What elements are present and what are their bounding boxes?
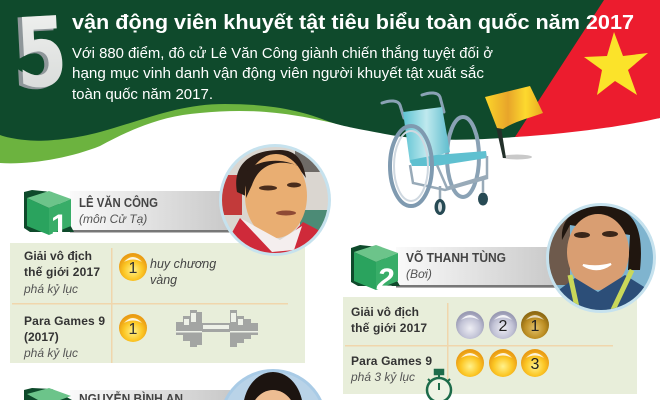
header: dark green banner — [0, 0, 660, 141]
medal caption: huy chương — [150, 257, 216, 271]
header bar 2 — [396, 247, 556, 288]
icon: yellow flag — [485, 86, 543, 160]
big number 5: 5 — [10, 0, 66, 112]
icon: wheelchair — [382, 93, 488, 215]
panel: stats 1: phá kỷ lục — [23, 282, 78, 296]
panel: stats 1: (2017) — [24, 330, 59, 344]
icon: stopwatch — [427, 370, 451, 400]
panel: stats 2: Para Games 9 — [351, 354, 432, 368]
athlete 1 — [10, 144, 331, 363]
header bar 3 — [70, 390, 230, 400]
panel: stats 2 — [343, 297, 637, 400]
medals world championship — [456, 311, 549, 339]
icon: barbell — [176, 310, 258, 347]
icon: cube 1: 1 — [51, 209, 68, 242]
intro text — [72, 45, 493, 103]
photo: Lê Văn Công — [219, 144, 331, 258]
panel: stats 2: Giải vô địch — [351, 305, 419, 319]
name 1: LÊ VĂN CÔNG — [79, 195, 158, 210]
medal gold: 1 — [129, 260, 138, 277]
medal caption — [150, 257, 216, 287]
panel: stats 2: phá 3 kỷ lục — [350, 370, 415, 384]
title: vận động viên khuyết tật tiêu biểu toàn quốc năm 2017 — [72, 12, 634, 34]
panel: stats 1: Giải vô địch — [24, 249, 92, 263]
big number 5: 5 — [13, 0, 70, 111]
sport 2: (Bơi) — [406, 267, 432, 281]
icon: cube 1 — [24, 190, 74, 242]
icon: cube 3 — [24, 388, 72, 400]
header: light green wave — [0, 90, 345, 163]
intro text: toàn quốc năm 2017. — [72, 86, 213, 103]
intro text: hạng mục vinh danh vận động viên người khuyết tật xuất sắc — [72, 65, 485, 82]
medal caption: vàng — [150, 273, 177, 287]
medal gold para: 1 — [129, 321, 138, 338]
sport 1: (môn Cử Tạ) — [79, 212, 147, 226]
medal gold — [119, 253, 147, 281]
red flag background — [515, 0, 660, 137]
medals world championship: 1 — [531, 318, 540, 335]
intro text: Với 880 điểm, đô cử Lê Văn Công giành chiến thắng tuyệt đối ở — [72, 45, 493, 62]
medals para games — [456, 349, 549, 377]
medal gold para — [119, 314, 147, 342]
icon: cube 2 — [351, 245, 400, 296]
panel: stats 1: Para Games 9 — [24, 314, 105, 328]
panel: stats 1 — [10, 243, 305, 363]
icon: cube 2: 2 — [376, 263, 394, 296]
medals world championship: 2 — [499, 318, 508, 335]
photo: Võ Thanh Tùng — [545, 203, 657, 315]
flag star — [584, 32, 648, 95]
photo: Nguyễn Bình An — [224, 369, 322, 400]
panel: stats 1: phá kỷ lục — [23, 346, 78, 360]
athlete 3 — [24, 369, 330, 400]
athlete 2 — [343, 203, 657, 400]
name 2: VÕ THANH TÙNG — [406, 250, 506, 265]
panel: stats 1: thế giới 2017 — [24, 265, 100, 279]
medals para games: 3 — [531, 356, 540, 373]
header bar 1 — [70, 191, 230, 232]
panel: stats 2: thế giới 2017 — [351, 321, 427, 335]
